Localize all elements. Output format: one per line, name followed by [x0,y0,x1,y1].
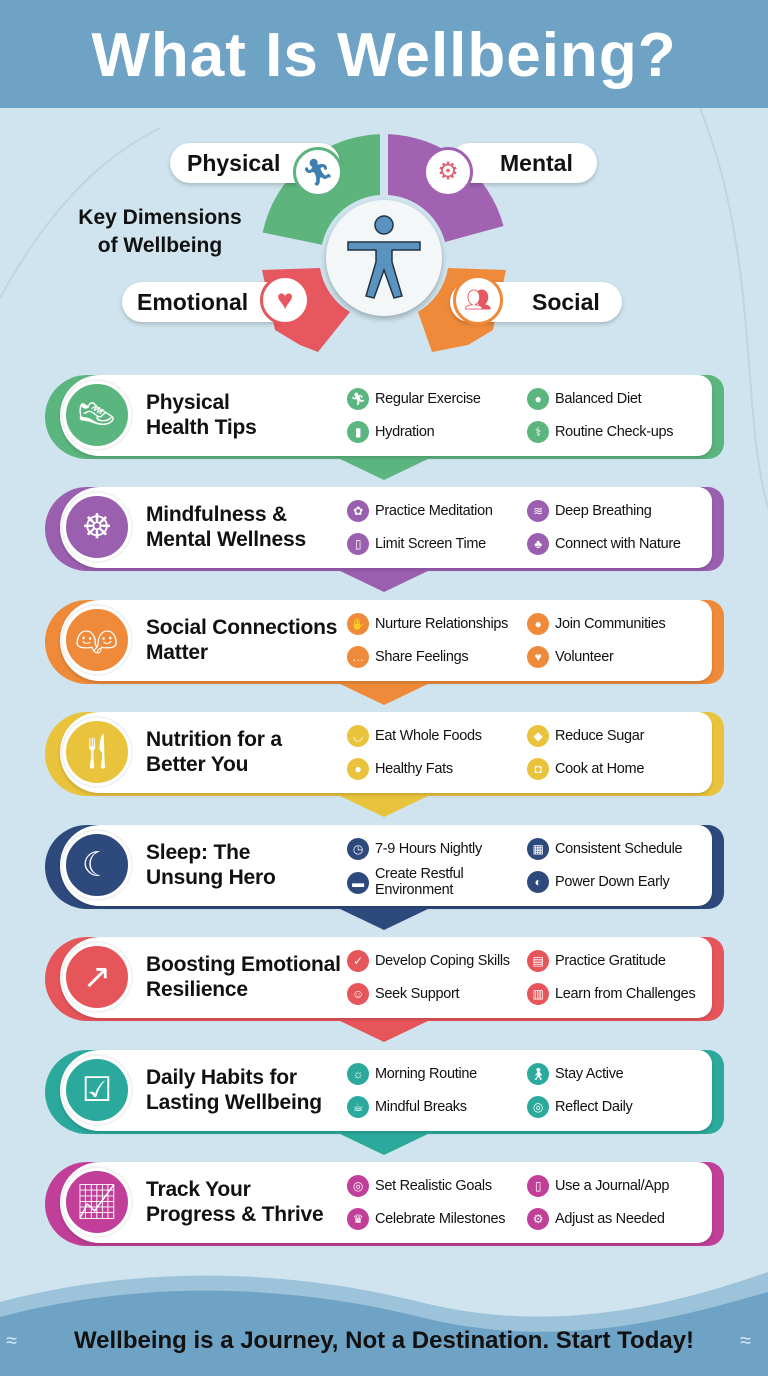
icon: plate [63,718,131,786]
items [347,725,482,747]
card: nutrition: Reduce Sugar [555,728,644,744]
icon: people: 👥︎ [464,287,492,312]
icon: heart [260,275,310,325]
title [146,503,306,551]
card: mindfulness: Deep Breathing [555,503,652,519]
card: mindfulness: ≋ [533,504,543,518]
card: track progress: Use a Journal/App [555,1178,669,1194]
card: physical [45,375,724,480]
title: Nutrition for a [146,728,282,751]
title: Sleep: The [146,841,250,864]
card: nutrition: ◆ [534,729,542,743]
footer wave [0,1272,768,1376]
items [347,500,493,522]
card: nutrition: ◘ [535,762,541,776]
footer tagline: Wellbeing is a Journey, Not a Destination. Start Today! [74,1327,694,1354]
title: Resilience [146,978,248,1001]
title [146,841,276,889]
card: social: ● [535,617,541,631]
title [146,391,257,439]
items: ✓ [353,954,363,968]
header [0,0,768,108]
subtitle: key dimensions: of Wellbeing [98,234,222,257]
card: sleep: ▦ [532,842,544,856]
card: sleep [45,825,724,930]
title: Lasting Wellbeing [146,1091,322,1114]
header: What Is Wellbeing? [91,21,677,90]
icon: people [453,275,503,325]
decorative waves: ≈ [6,1330,17,1352]
card: track progress: ⚙ [533,1212,543,1226]
icon: meditation [63,493,131,561]
card: track progress: ♛ [353,1212,363,1226]
card: track progress: Celebrate Milestones [375,1211,505,1227]
pill: Mental [450,143,597,183]
items: Set Realistic Goals [375,1178,492,1194]
title: Mindfulness & [146,503,287,526]
items: Nurture Relationships [375,616,508,632]
card: track progress [45,1162,724,1246]
items: 7-9 Hours Nightly [375,841,482,857]
card: resilience: ☺ [352,987,364,1001]
card: physical: Hydration [375,424,434,440]
icon: holding hands: 👫︎ [75,621,119,659]
card: resilience: Learn from Challenges [555,986,695,1002]
title: Daily Habits for [146,1066,297,1089]
card: social: ♥ [535,650,541,664]
title [146,616,337,664]
title: Better You [146,753,248,776]
pill: Emotional: Emotional [137,289,248,315]
card: physical: Routine Check-ups [555,424,673,440]
title [146,953,341,1001]
card: daily habits: 🚶︎ [531,1067,545,1081]
icon: plate: 🍴︎ [75,733,119,771]
items: ◡ [353,729,363,743]
center figure [326,200,442,316]
items: ✿ [353,504,363,518]
icon: heart: ♥ [277,284,293,315]
card: social: Volunteer [555,649,614,665]
card: nutrition: ● [355,762,361,776]
items [347,1175,492,1197]
card: sleep: ▬ [352,876,364,890]
card: sleep: Environment [375,882,453,898]
card: nutrition: Cook at Home [555,761,644,777]
icon: chart: 📈︎ [75,1183,119,1221]
card: mindfulness: Connect with Nature [555,536,681,552]
card: mindfulness [45,487,724,592]
items [347,950,510,972]
pill: Social [450,282,622,322]
card: social: Join Communities [555,616,665,632]
items: Practice Meditation [375,503,493,519]
title: Unsung Hero [146,866,276,889]
items: Develop Coping Skills [375,953,510,969]
items: Regular Exercise [375,391,481,407]
card: mindfulness: ♣ [534,537,542,551]
title: Progress & Thrive [146,1203,324,1226]
icon: checklist [63,1056,131,1124]
card: track progress: ▯ [535,1179,541,1193]
title: Mental Wellness [146,528,306,551]
card: sleep: Power Down Early [555,874,669,890]
card: social [45,600,724,705]
items: ◷ [353,842,363,856]
card: resilience [45,937,724,1042]
card: daily habits: ☕︎ [353,1100,363,1114]
icon: shoe [63,381,131,449]
items [347,838,482,860]
card: daily habits: Reflect Daily [555,1099,632,1115]
title: Matter [146,641,208,664]
text: ≈ [740,1330,751,1352]
title: Boosting Emotional [146,953,341,976]
pill: Social: Social [532,289,600,315]
icon: runner [293,147,343,197]
icon: holding hands [63,606,131,674]
icon: brain: ⚙ [437,158,459,185]
card: sleep: Consistent Schedule [555,841,682,857]
items: Eat Whole Foods [375,728,482,744]
title [146,1178,324,1226]
card: track progress: Adjust as Needed [555,1211,665,1227]
diagram: key dimensions [78,134,624,352]
card: social: Share Feelings [375,649,468,665]
card: daily habits [45,1050,724,1155]
card: daily habits: Stay Active [555,1066,623,1082]
card: daily habits: ◎ [533,1100,543,1114]
items: Morning Routine [375,1066,477,1082]
icon: runner: 🏃︎ [301,157,334,187]
icon: checklist: ☑ [82,1071,112,1109]
title [146,1066,322,1114]
icon: shoe: 👟︎ [75,396,119,434]
pill: Mental: Mental [500,150,573,176]
card: physical: ● [535,392,541,406]
items: 🏃︎ [351,392,365,406]
card: daily habits: Mindful Breaks [375,1099,467,1115]
ring segments [262,134,506,352]
icon: spring arrow [63,943,131,1011]
icon: chart [63,1168,131,1236]
items: ☼ [353,1067,363,1081]
icon: meditation: ☸ [82,508,112,546]
pill: Emotional [122,282,297,322]
pill: Physical: Physical [187,150,280,176]
card: resilience: ▤ [532,954,544,968]
pill: Physical [170,143,340,183]
card: nutrition [45,712,724,817]
card: physical: ⚕ [535,425,541,439]
card: physical: ▮ [355,425,361,439]
card: physical: Balanced Diet [555,391,641,407]
card: sleep: Create Restful [375,866,463,882]
title [146,728,282,776]
icon: brain [423,147,473,197]
items [347,613,508,635]
items [347,388,481,410]
title: Track Your [146,1178,251,1201]
subtitle: key dimensions [78,206,242,257]
card: resilience: ▥ [532,987,544,1001]
card: mindfulness: ▯ [355,537,361,551]
title: Social Connections [146,616,337,639]
card: nutrition: Healthy Fats [375,761,453,777]
icon: moon: ☾ [82,846,112,884]
subtitle: key dimensions: Key Dimensions [78,206,242,229]
items: ◎ [353,1179,363,1193]
items: ✋ [351,617,365,631]
title: Health Tips [146,416,257,439]
card: social: … [352,650,364,664]
items [347,1063,477,1085]
card: mindfulness: Limit Screen Time [375,536,486,552]
icon: moon [63,831,131,899]
title: Physical [146,391,230,414]
card: resilience: Seek Support [375,986,459,1002]
card: resilience: Practice Gratitude [555,953,666,969]
card: sleep: ◐ [535,875,541,889]
icon: spring arrow: ↗ [83,958,111,996]
